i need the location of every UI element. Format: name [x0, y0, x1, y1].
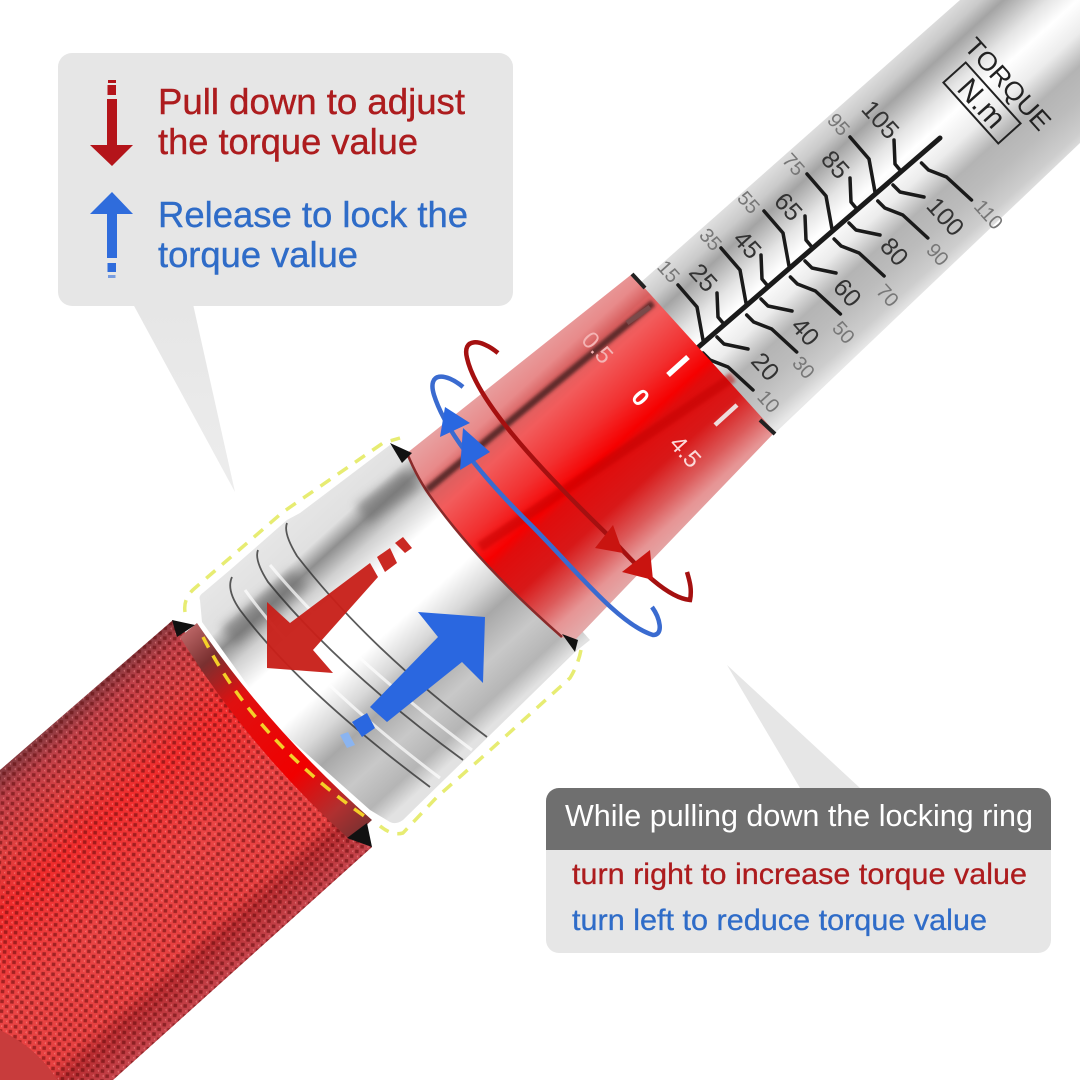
callout: locking ring instructions	[546, 788, 1051, 953]
collar numbers: 4.5	[664, 431, 706, 473]
knurled red grip	[0, 620, 372, 1080]
rotation arrow: red	[466, 342, 691, 600]
scale numbers dark: 100	[921, 192, 969, 242]
scale numbers grey: 75	[777, 149, 809, 181]
ring grooves	[230, 523, 487, 787]
yellow dashed outline	[185, 438, 581, 834]
ring shadow band	[228, 478, 412, 636]
collar groove	[427, 303, 653, 490]
short upper ticks	[717, 140, 900, 323]
tool tube	[640, 0, 1080, 435]
collar numbers	[576, 327, 706, 473]
scale numbers grey: 50	[827, 317, 859, 349]
scale numbers dark	[683, 95, 969, 387]
collar ticks	[627, 307, 650, 323]
short lower ticks	[717, 185, 924, 349]
scale numbers dark: 85	[815, 145, 855, 185]
groove highlights	[245, 565, 472, 778]
callout: locking ring instructions: While pulling down the locking ring	[565, 798, 1033, 833]
callout: pull and release	[58, 53, 513, 306]
collar left rim	[407, 453, 562, 637]
ring tips	[172, 443, 578, 847]
silver locking ring	[200, 445, 590, 823]
scale numbers grey: 35	[694, 224, 726, 256]
scale numbers dark: 40	[785, 312, 825, 352]
scale numbers dark: 65	[768, 187, 808, 227]
pull text: Pull down to adjust	[158, 81, 465, 122]
callout pointer: bottom right	[727, 665, 860, 788]
long lower ticks	[703, 163, 972, 390]
release text: Release to lock the	[158, 194, 468, 235]
pull text	[158, 81, 465, 162]
scale numbers dark: 60	[827, 273, 867, 313]
rotation arrow: blue	[432, 377, 660, 635]
scale numbers dark: 80	[874, 232, 914, 272]
pull text: the torque value	[158, 121, 418, 162]
collar numbers: 0.5	[576, 327, 618, 369]
icon: blue up arrow	[90, 192, 133, 278]
long upper ticks	[678, 137, 875, 340]
collar end rims	[632, 274, 775, 434]
release arrow on ring	[340, 612, 485, 748]
torque label: TORQUE	[959, 32, 1057, 136]
scale numbers dark: 25	[683, 258, 723, 298]
scale numbers dark: 20	[745, 347, 785, 387]
scale numbers grey: 55	[732, 187, 764, 219]
scale main line	[695, 138, 940, 350]
icon: red down arrow	[90, 80, 133, 166]
scale numbers grey: 10	[752, 386, 784, 418]
scale numbers grey: 70	[871, 280, 903, 312]
scale numbers grey: 90	[921, 239, 953, 271]
scale numbers grey	[652, 109, 1007, 418]
scale numbers dark: 105	[856, 95, 904, 145]
scale numbers grey: 15	[652, 256, 684, 288]
unit box: N.m	[951, 72, 1012, 135]
red adjusting collar	[407, 274, 775, 640]
pull-down arrow on ring	[267, 537, 412, 673]
torque scale	[678, 137, 972, 390]
callout pointer: top left	[133, 304, 235, 492]
grip end	[0, 1030, 57, 1080]
scale numbers grey: 30	[787, 352, 819, 384]
scale numbers grey: 110	[969, 196, 1007, 234]
grip shoulder band	[180, 623, 372, 840]
collar numbers: 0	[625, 384, 655, 412]
callout header	[546, 788, 1051, 850]
release text	[158, 194, 468, 275]
release text: torque value	[158, 234, 358, 275]
increase text: turn right to increase torque value	[572, 858, 1027, 891]
scale numbers grey: 95	[822, 109, 854, 141]
reduce text: turn left to reduce torque value	[572, 904, 987, 937]
scale numbers dark: 45	[727, 225, 767, 265]
